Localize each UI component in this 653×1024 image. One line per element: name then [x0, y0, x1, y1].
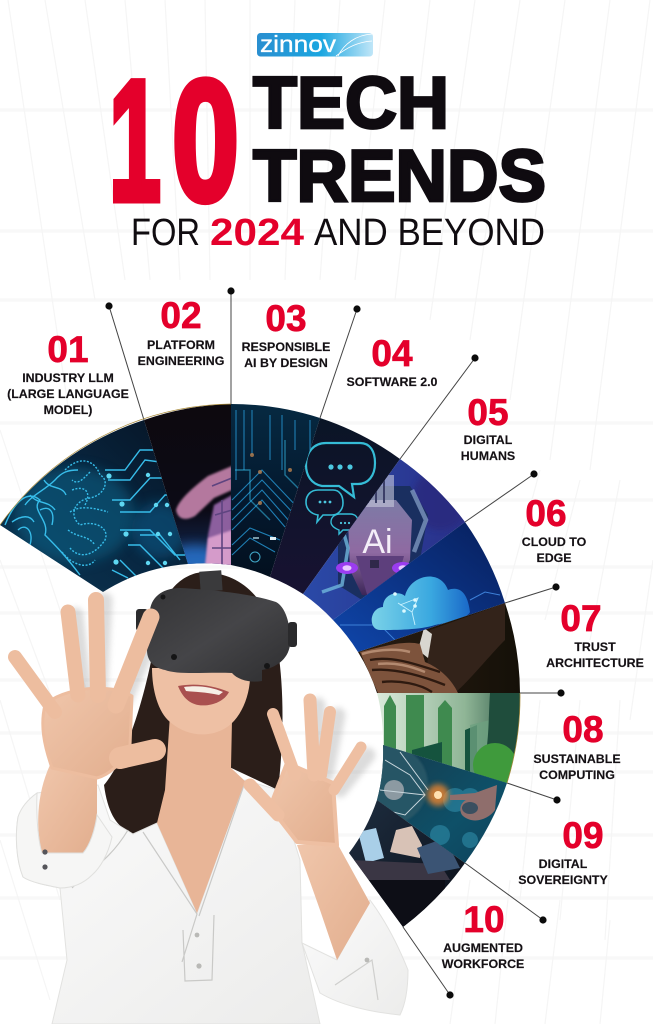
right forearm	[297, 843, 370, 960]
label 07: Trust Architecture: TRUST	[574, 640, 616, 654]
shirt body	[16, 780, 320, 1024]
logo: zinnov	[257, 31, 373, 57]
segment 04: chat bubbles	[270, 418, 400, 594]
label 08: Sustainable Computing: SUSTAINABLE	[533, 752, 621, 766]
label 05: Digital Humans: DIGITAL	[464, 433, 513, 447]
label 09: Digital Sovereignty	[518, 815, 608, 887]
label 08: Sustainable Computing: COMPUTING	[539, 768, 615, 782]
label 02: Platform Engineering: 02	[160, 295, 202, 336]
shirt buttons	[195, 933, 369, 969]
label 01: Industry LLM: INDUSTRY LLM	[22, 371, 114, 385]
label 01: Industry LLM	[7, 329, 129, 417]
label 03: Responsible AI by Design: AI BY DESIGN	[244, 356, 328, 370]
subtitle: FOR	[131, 212, 200, 254]
label 10: Augmented Workforce: AUGMENTED	[443, 941, 523, 955]
segment 05: AI robot: Ai	[362, 523, 393, 561]
photo: woman wearing VR headset	[15, 570, 408, 1024]
hand shadows	[76, 600, 368, 790]
title	[109, 45, 546, 237]
left forearm	[38, 765, 97, 853]
label 04: Software 2.0: 04	[371, 333, 413, 374]
label 06: Cloud to Edge: CLOUD TO	[522, 535, 587, 549]
segment 07: hands together	[355, 600, 525, 695]
hair	[104, 572, 282, 834]
label 03: Responsible AI by Design: 03	[265, 298, 307, 339]
segment 06: cloud	[333, 522, 505, 652]
label 03: Responsible AI by Design: RESPONSIBLE	[242, 340, 330, 354]
segment 09: globe and finger	[377, 745, 507, 863]
label 02: Platform Engineering: PLATFORM	[147, 338, 215, 352]
subtitle: AND BEYOND	[314, 212, 545, 254]
label 10: Augmented Workforce: WORKFORCE	[442, 957, 524, 971]
label 08: Sustainable Computing	[533, 709, 621, 782]
neck and chest	[157, 715, 245, 913]
segment 03: circuit board	[231, 404, 320, 577]
label 05: Digital Humans: 05	[467, 392, 509, 433]
headset	[147, 588, 290, 682]
segment 05: AI robot	[300, 455, 470, 625]
label 05: Digital Humans	[461, 392, 515, 463]
label 03: Responsible AI by Design	[242, 298, 330, 370]
title: TECH	[253, 63, 449, 144]
headset strap	[199, 570, 223, 592]
label 09: Digital Sovereignty: DIGITAL	[539, 857, 588, 871]
leader lines with dots	[105, 287, 565, 999]
label 10: Augmented Workforce	[442, 899, 524, 971]
label 09: Digital Sovereignty: SOVEREIGNTY	[518, 873, 608, 887]
label 07: Trust Architecture: 07	[560, 598, 602, 639]
label 10: Augmented Workforce: 10	[463, 899, 505, 940]
label 04: Software 2.0: SOFTWARE 2.0	[347, 375, 438, 389]
mouth	[178, 685, 229, 705]
face	[152, 668, 250, 734]
subtitle: 2024	[210, 212, 304, 254]
right hand	[250, 700, 361, 845]
segment 08: green city	[377, 693, 520, 783]
subtitle	[131, 212, 545, 254]
left cuff	[16, 793, 112, 888]
label 06: Cloud to Edge: EDGE	[536, 551, 572, 565]
label 01: Industry LLM: 01	[47, 329, 89, 370]
title: TRENDS	[253, 136, 546, 217]
label 08: Sustainable Computing: 08	[562, 709, 604, 750]
label 01: Industry LLM: (LARGE LANGUAGE	[7, 387, 129, 401]
logo: zinnov: zinnov	[260, 31, 337, 57]
outer rim highlight	[0, 404, 520, 783]
title: 0	[172, 45, 239, 237]
label 06: Cloud to Edge: 06	[525, 493, 567, 534]
title: 1	[109, 45, 161, 237]
left hand	[15, 600, 155, 778]
label 09: Digital Sovereignty: 09	[562, 815, 604, 856]
right sleeve	[302, 900, 408, 1015]
label 05: Digital Humans: HUMANS	[461, 449, 515, 463]
label 07: Trust Architecture	[546, 598, 644, 670]
segment 02: robotic hand	[144, 404, 231, 565]
label 02: Platform Engineering: ENGINEERING	[138, 354, 224, 368]
label 06: Cloud to Edge	[522, 493, 587, 565]
segment 10: augmented workforce	[349, 800, 465, 927]
label 01: Industry LLM: MODEL)	[44, 403, 92, 417]
label 04: Software 2.0	[347, 333, 438, 389]
label 07: Trust Architecture: ARCHITECTURE	[546, 656, 644, 670]
segment 01: brain circuit	[0, 420, 188, 592]
label 02: Platform Engineering	[138, 295, 224, 368]
